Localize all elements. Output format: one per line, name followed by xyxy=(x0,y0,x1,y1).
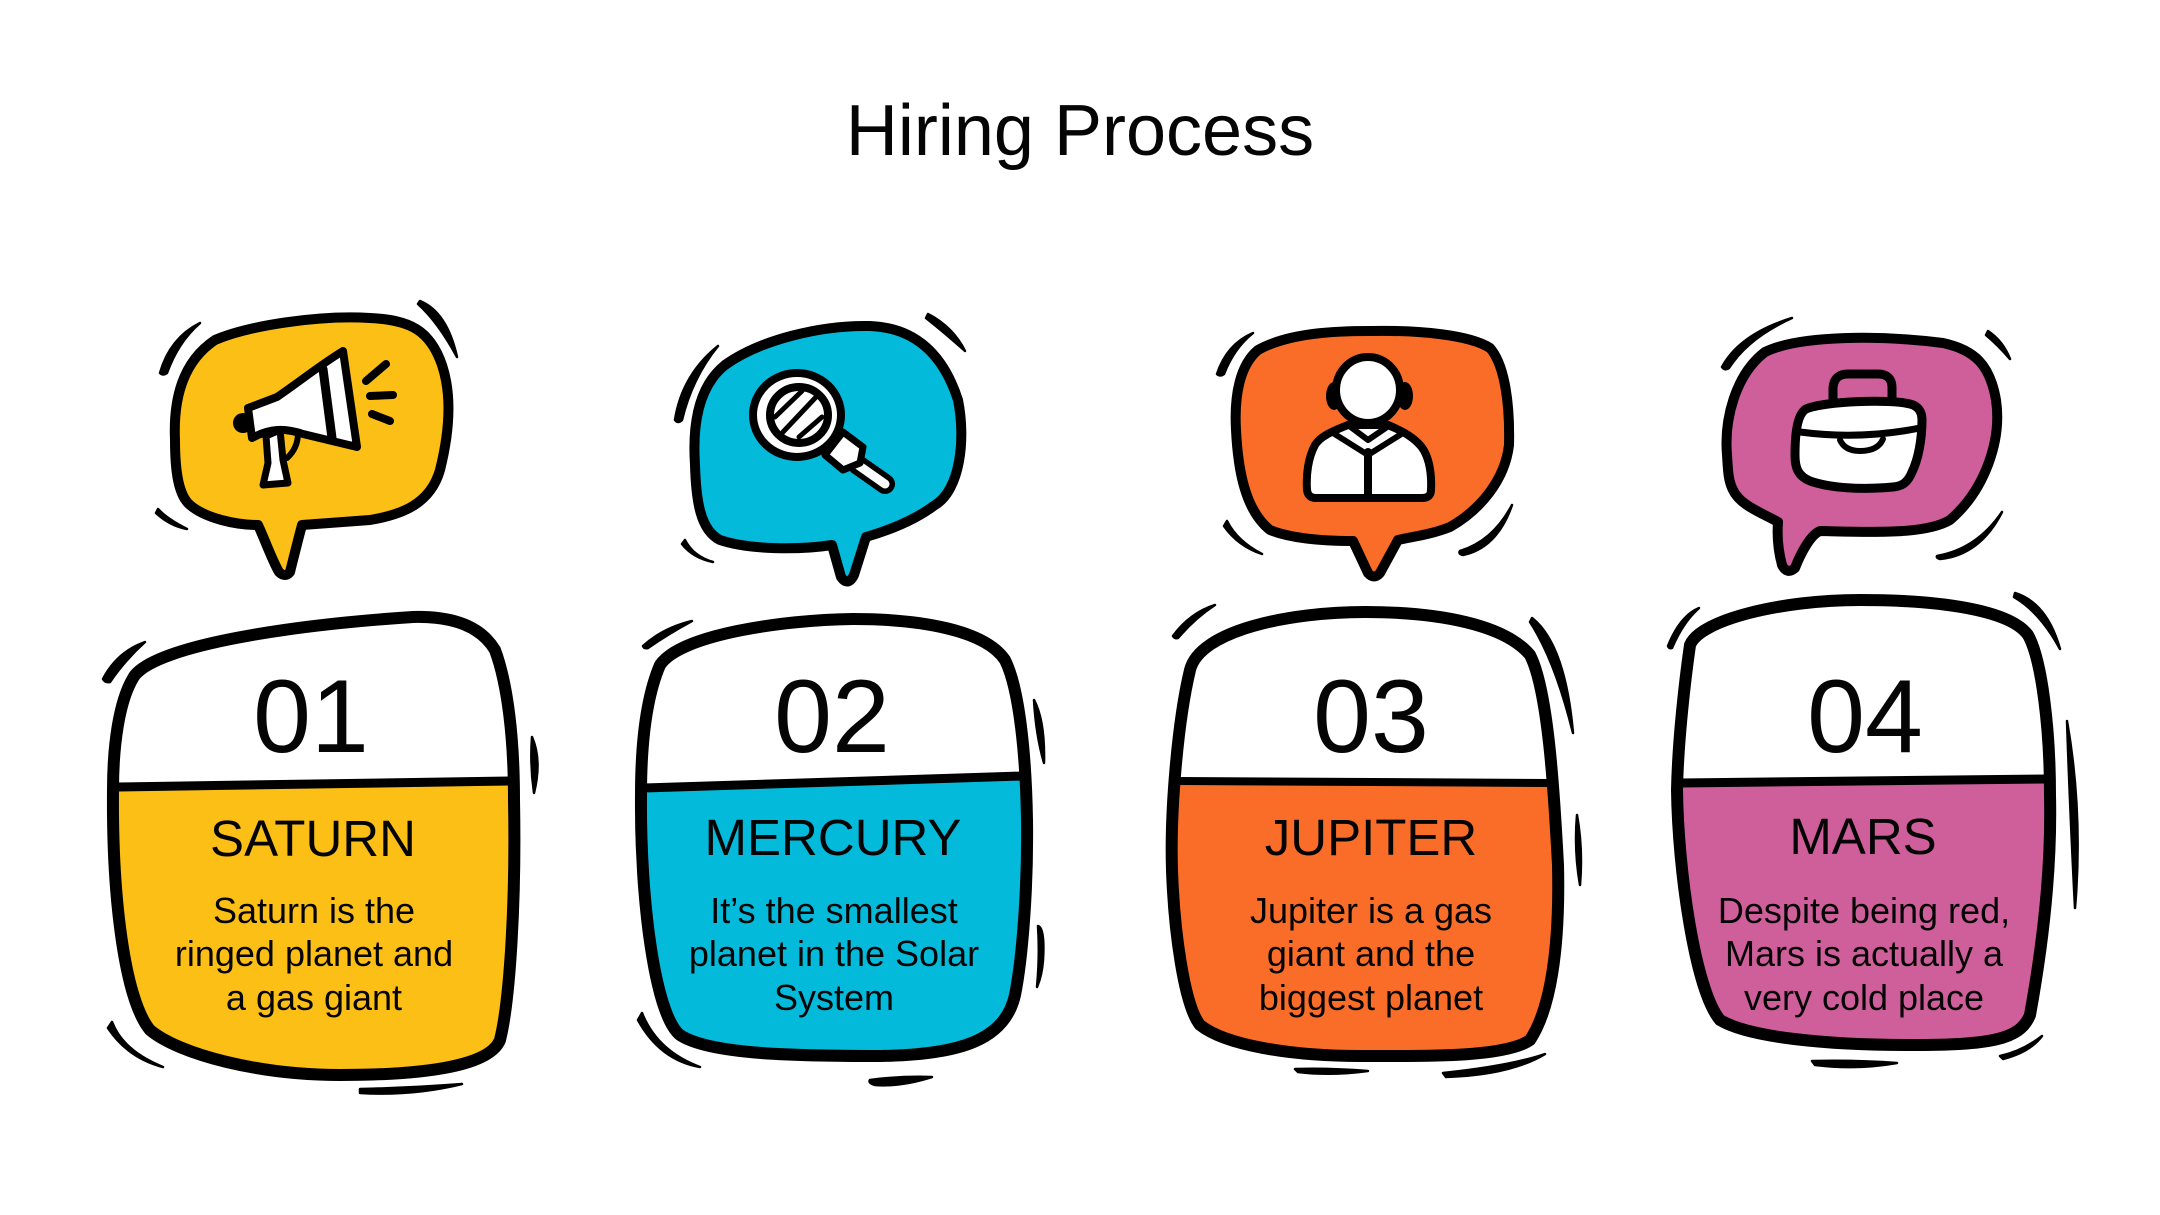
description: Jupiter: biggest planet xyxy=(1259,977,1483,1018)
description: Saturn: Saturn is the xyxy=(213,890,415,931)
step number 04: 04 xyxy=(1807,659,1923,775)
description: Mars: Despite being red, xyxy=(1718,890,2010,931)
heading: Mars: MARS xyxy=(1789,808,1937,865)
step 04: Mars xyxy=(1660,318,2078,1067)
description: Mars: very cold place xyxy=(1744,977,1984,1018)
description: Mercury: planet in the Solar xyxy=(689,933,979,974)
step number 03: 03 xyxy=(1313,659,1429,775)
description: Saturn: a gas giant xyxy=(226,977,402,1018)
step 02: Mercury xyxy=(630,314,1044,1085)
step 01: Saturn xyxy=(100,301,538,1094)
heading: Mercury: MERCURY xyxy=(705,809,961,866)
icon: person with headset xyxy=(1307,357,1431,498)
description: Jupiter: giant and the xyxy=(1267,933,1475,974)
speech bubble: Mars xyxy=(1722,318,2010,571)
heading: Jupiter: JUPITER xyxy=(1265,809,1477,866)
title: Hiring Process xyxy=(846,91,1314,171)
panel: Mercury card xyxy=(630,600,1044,1085)
step number 01: 01 xyxy=(253,659,369,775)
speech bubble: Jupiter xyxy=(1217,331,1512,576)
description: Jupiter: Jupiter is a gas xyxy=(1250,890,1492,931)
icon: megaphone xyxy=(233,351,393,485)
icon: magnifying glass xyxy=(753,373,885,484)
step 03: Jupiter xyxy=(1150,331,1581,1077)
icon: briefcase xyxy=(1795,374,1922,488)
heading: Saturn: SATURN xyxy=(210,810,416,867)
panel: Mars card xyxy=(1660,590,2078,1067)
panel: Saturn card xyxy=(100,600,538,1094)
description: Mercury: System xyxy=(774,977,894,1018)
step number 02: 02 xyxy=(774,659,890,775)
description: Saturn: ringed planet and xyxy=(175,933,453,974)
panel: Jupiter card xyxy=(1150,600,1581,1077)
speech bubble: Saturn xyxy=(156,301,457,575)
description: Mars: Mars is actually a xyxy=(1725,933,2004,974)
speech bubble: Mercury xyxy=(675,314,965,582)
description: Mercury: It’s the smallest xyxy=(710,890,958,931)
